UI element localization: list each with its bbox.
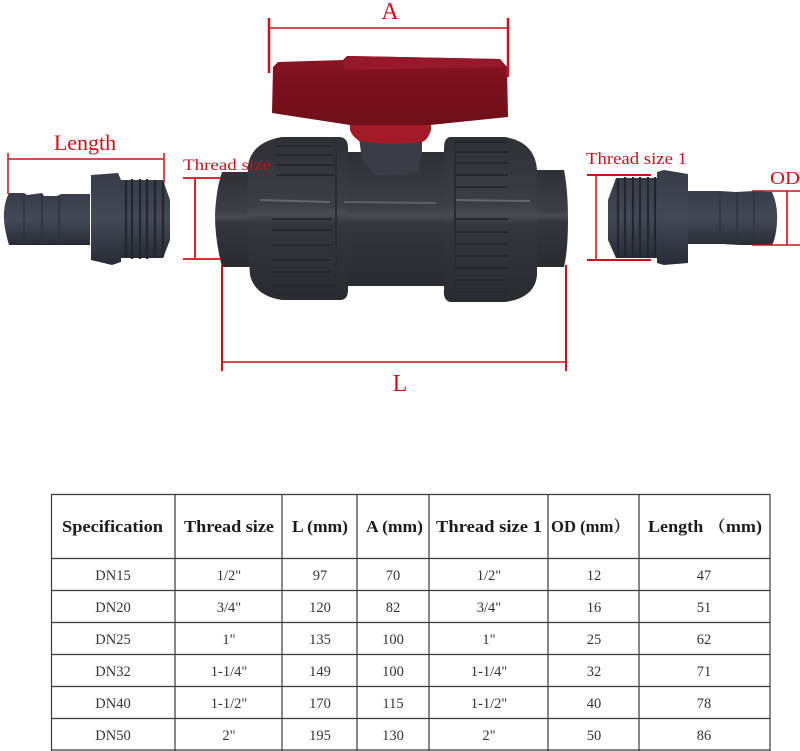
row DN20: 120 bbox=[309, 600, 331, 616]
row DN50: 86 bbox=[697, 728, 711, 744]
row DN40: 40 bbox=[587, 696, 601, 712]
header row: A (mm) bbox=[366, 517, 423, 536]
barb bbox=[688, 191, 777, 245]
row DN32: 1-1/4" bbox=[211, 664, 247, 680]
row DN40: 170 bbox=[309, 696, 331, 712]
dimension: Thread size bbox=[183, 157, 271, 259]
header row: L (mm) bbox=[292, 517, 348, 536]
row DN40: 1-1/2" bbox=[471, 696, 507, 712]
row DN40 bbox=[95, 696, 711, 712]
dimension: A bbox=[269, 0, 508, 77]
row DN32: 100 bbox=[382, 664, 404, 680]
row DN15: 47 bbox=[697, 568, 711, 584]
row DN50: 50 bbox=[587, 728, 601, 744]
left union nut bbox=[247, 137, 348, 300]
right hose fitting bbox=[608, 170, 777, 265]
header row: Length （mm) bbox=[648, 517, 762, 536]
row DN32: 32 bbox=[587, 664, 601, 680]
row DN32 bbox=[95, 664, 711, 680]
left hex end bbox=[215, 172, 250, 267]
red handle bbox=[272, 56, 508, 125]
row DN20: 16 bbox=[587, 600, 601, 616]
row DN25: 1" bbox=[482, 632, 496, 648]
dimension: Length bbox=[8, 130, 164, 194]
row DN40: 1-1/2" bbox=[211, 696, 247, 712]
dimension: Thread size: Thread size bbox=[183, 157, 271, 174]
dimension: Thread size 1 bbox=[586, 149, 687, 260]
row DN50: 195 bbox=[309, 728, 331, 744]
row DN50: 2" bbox=[222, 728, 236, 744]
specification table bbox=[51, 494, 770, 751]
header row: OD (mm） bbox=[551, 517, 630, 536]
handle raised top bbox=[343, 56, 504, 70]
row DN40: 78 bbox=[697, 696, 711, 712]
header row: Thread size 1 bbox=[436, 517, 542, 536]
row DN25 bbox=[95, 632, 711, 648]
row DN32: 149 bbox=[309, 664, 331, 680]
row DN15: 12 bbox=[587, 568, 601, 584]
row DN50: 2" bbox=[482, 728, 496, 744]
body highlight bbox=[344, 202, 436, 203]
thread bbox=[608, 178, 657, 258]
dimension: Length: Length bbox=[54, 130, 116, 155]
row DN25: DN25 bbox=[95, 632, 131, 648]
row DN15: 97 bbox=[313, 568, 327, 584]
thread bbox=[121, 180, 170, 258]
row DN25: 62 bbox=[697, 632, 711, 648]
dimension: Thread size 1: Thread size 1 bbox=[586, 149, 687, 168]
hex collar bbox=[91, 173, 121, 265]
red handle collar bbox=[350, 122, 431, 144]
row DN15 bbox=[95, 568, 711, 584]
row DN15: 1/2" bbox=[217, 568, 241, 584]
row DN50: DN50 bbox=[95, 728, 131, 744]
row DN20: 3/4" bbox=[217, 600, 241, 616]
row DN50: 130 bbox=[382, 728, 404, 744]
row DN20: DN20 bbox=[95, 600, 131, 616]
ball valve bbox=[215, 56, 568, 302]
valve body bbox=[342, 152, 444, 286]
header row: Specification bbox=[62, 517, 163, 536]
dimension: L bbox=[222, 265, 566, 397]
barb bbox=[4, 193, 90, 245]
row DN40: 115 bbox=[382, 696, 404, 712]
table grid bbox=[51, 494, 770, 751]
dimension: OD: OD bbox=[770, 168, 800, 188]
header row bbox=[62, 517, 762, 536]
row DN20: 82 bbox=[386, 600, 400, 616]
row DN15: DN15 bbox=[95, 568, 131, 584]
header row: Thread size bbox=[184, 517, 274, 536]
row DN20 bbox=[95, 600, 711, 616]
dimension: OD bbox=[752, 168, 800, 245]
row DN32: 71 bbox=[697, 664, 711, 680]
hex collar bbox=[657, 170, 688, 265]
row DN15: 70 bbox=[386, 568, 400, 584]
row DN50 bbox=[95, 728, 711, 744]
row DN32: 1-1/4" bbox=[471, 664, 507, 680]
row DN15: 1/2" bbox=[477, 568, 501, 584]
row DN25: 100 bbox=[382, 632, 404, 648]
dimension: L: L bbox=[393, 371, 407, 397]
row DN20: 3/4" bbox=[477, 600, 501, 616]
row DN25: 1" bbox=[222, 632, 236, 648]
row DN25: 25 bbox=[587, 632, 601, 648]
row DN40: DN40 bbox=[95, 696, 131, 712]
row DN25: 135 bbox=[309, 632, 331, 648]
right hex end bbox=[535, 170, 568, 267]
right union nut bbox=[444, 137, 537, 302]
row DN20: 51 bbox=[697, 600, 711, 616]
left hose fitting bbox=[4, 173, 170, 265]
row DN32: DN32 bbox=[95, 664, 131, 680]
valve stem bbox=[359, 138, 422, 175]
